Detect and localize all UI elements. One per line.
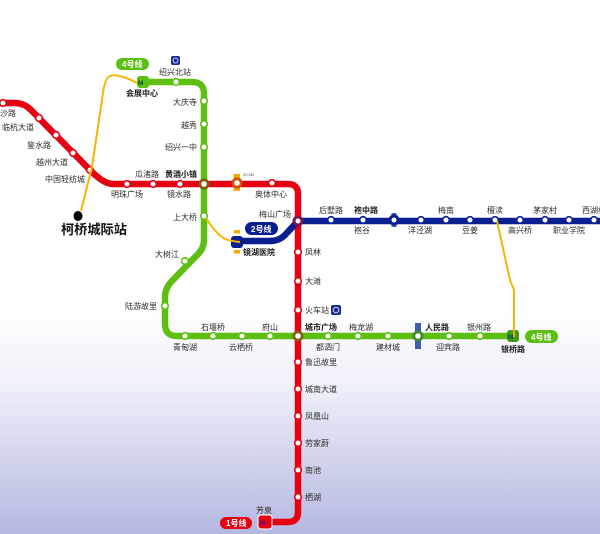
- stations: line 2: [328, 217, 597, 223]
- label: keqiao intercity station: 柯桥城际站: [61, 221, 127, 237]
- station labels: 大树江: [155, 249, 179, 259]
- terminal: fangquan: M: [260, 520, 265, 527]
- station labels: 都泗门: [316, 342, 340, 352]
- station labels: 茅家村: [533, 205, 557, 215]
- station labels: 凤林: [305, 247, 321, 257]
- station labels: 职业学院: [553, 225, 585, 235]
- interchange: east station with orange bars: 39.9M: [243, 172, 254, 177]
- stations: line 4: [162, 79, 483, 339]
- station labels: 鉴水路: [27, 140, 51, 150]
- terminal: yinqiao road: M: [508, 334, 513, 341]
- line 2 blue route: [238, 221, 600, 241]
- station labels: 梅南: [438, 205, 454, 215]
- station labels: 明珠广场: [111, 189, 143, 199]
- station labels: 大滩: [305, 276, 321, 286]
- station labels: 中国轻纺城: [45, 174, 85, 184]
- station labels: 大庆寺: [173, 97, 197, 107]
- badge: line 2: 2号线: [251, 224, 271, 234]
- station labels: 袍中路: [354, 205, 378, 215]
- station labels: 梅山广场: [259, 209, 291, 219]
- station labels: 奥体中心: [255, 189, 287, 199]
- station labels: 绍兴北站: [159, 67, 191, 77]
- station labels: 绍兴一中: [165, 142, 197, 152]
- yellow connector: keqiao intercity: [81, 75, 137, 211]
- stations: line 1: [0, 100, 301, 500]
- terminal: yinqiao road: [507, 330, 519, 342]
- station labels: 袍谷: [354, 225, 370, 235]
- station labels: 南池: [305, 465, 321, 475]
- station labels: 洋泾湖: [408, 225, 432, 235]
- station labels: 城南大道: [305, 384, 337, 394]
- station labels: 人民路: [425, 322, 449, 332]
- icon: railway shaoxing north: [171, 56, 180, 65]
- station labels: 豆姜: [462, 225, 478, 235]
- terminal: fangquan: [258, 515, 272, 529]
- station labels: 黄酒小镇: [165, 169, 197, 179]
- station labels: 迎宾路: [436, 342, 460, 352]
- station labels: 劳家蔚: [305, 438, 329, 448]
- station labels: 镜湖医院: [243, 247, 275, 257]
- line 4 green route: [144, 82, 512, 336]
- line 1 red route: [0, 103, 298, 522]
- terminal: jinghu hospital: [231, 230, 243, 254]
- badge: line 2: [245, 222, 278, 235]
- badge: line 4 right: 4号线: [531, 332, 551, 342]
- station labels: 凤凰山: [305, 411, 329, 421]
- station labels: 火车站: [305, 305, 329, 315]
- station labels: 栖湖: [305, 492, 321, 502]
- interchange: renmin road: [412, 323, 424, 349]
- station labels: 梅龙湖: [349, 322, 373, 332]
- station labels: 城市广场: [305, 322, 337, 332]
- terminal: huizhan center: [137, 76, 149, 88]
- station labels: 镜水路: [167, 189, 191, 199]
- yellow connector: jinghu: [206, 218, 240, 242]
- badge: line 1: [220, 517, 252, 529]
- station labels: 沙路: [0, 108, 16, 118]
- station labels: 瓜渚路: [135, 169, 159, 179]
- badge: line 4 top: 4号线: [122, 59, 142, 69]
- station labels: 越秀: [181, 120, 197, 130]
- station labels: 银州路: [467, 322, 491, 332]
- interchange: city square: [292, 330, 304, 342]
- station labels: 陆游故里: [125, 301, 157, 311]
- station labels: 上大桥: [173, 212, 197, 222]
- station labels: 会展中心: [126, 88, 158, 98]
- badge: line 1: 1号线: [226, 518, 246, 528]
- station labels: 银桥路: [501, 344, 525, 354]
- terminal: huizhan center: M: [138, 80, 143, 87]
- station labels: 云栖桥: [229, 342, 253, 352]
- station labels: 高兴桥: [508, 225, 532, 235]
- badge: line 4 top: [116, 58, 149, 70]
- interchange: huangjiu town: [198, 178, 210, 190]
- station labels: 石堰桥: [201, 322, 225, 332]
- station labels: 鲁迅故里: [305, 357, 337, 367]
- icon: railway station: [331, 305, 341, 315]
- badge: line 4 right: [525, 330, 558, 343]
- station labels: 檀渎: [487, 205, 503, 215]
- station labels: 临杭大道: [2, 122, 34, 132]
- interchange: east station with orange bars: [232, 172, 254, 191]
- marker: keqiao intercity station: [74, 211, 82, 221]
- station labels: 后墅路: [319, 205, 343, 215]
- station labels: 建材城: [376, 342, 400, 352]
- interchange: meishan square: [292, 216, 304, 226]
- station labels: 芳泉: [256, 505, 272, 515]
- station labels: 府山: [262, 322, 278, 332]
- station labels: 青甸湖: [173, 342, 197, 352]
- interchange: paozhong road: [388, 213, 400, 227]
- yellow connector: yinqiao: [497, 221, 514, 337]
- station labels: 越州大道: [36, 157, 68, 167]
